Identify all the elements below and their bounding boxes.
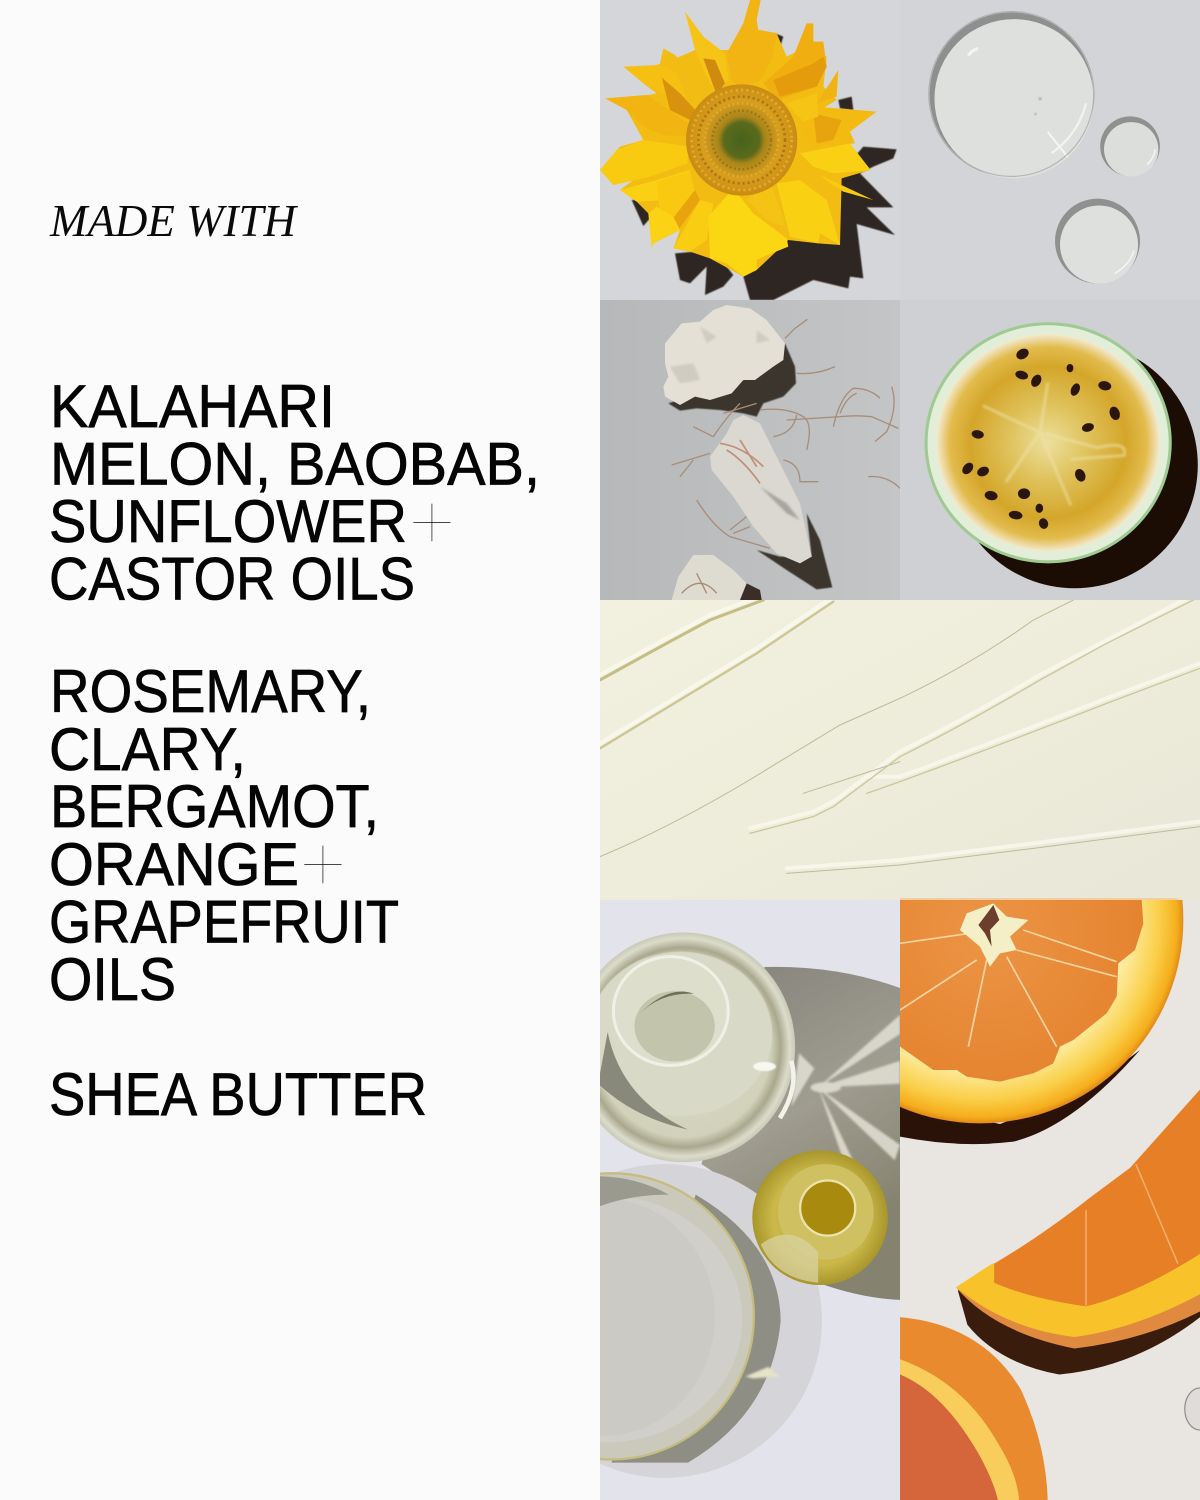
- water drop: [1185, 1388, 1200, 1430]
- centre seed cavity: [978, 905, 999, 947]
- text block: oils group two: ROSEMARY,: [50, 657, 371, 725]
- text block: oils group one: KALAHARI: [50, 372, 335, 440]
- wedge shadow: [958, 1283, 1200, 1375]
- top slice segment lines: [900, 930, 1117, 1047]
- text block: oils group one: CASTOR OILS: [49, 544, 415, 612]
- text block: oils group one: SUNFLOWER: [49, 487, 407, 555]
- photo: sunflower: [600, 0, 900, 300]
- shea lump three: [672, 555, 762, 600]
- small oil bottle: [752, 1150, 888, 1285]
- text block: oils group one: [49, 372, 540, 612]
- heading: made with: MADE WITH: [49, 195, 299, 246]
- photo: shea butter and roots: [600, 300, 900, 600]
- shea lump two: [710, 415, 812, 563]
- left panel background: [0, 0, 600, 1500]
- roots: [672, 319, 900, 548]
- text block: oils group two: BERGAMOT,: [50, 772, 379, 840]
- melon seeds: [960, 346, 1122, 530]
- top slice shadow: [900, 1050, 1140, 1144]
- top orange slice group: [900, 900, 1184, 1144]
- top slice flesh: [900, 900, 1143, 1082]
- shea lump one: [663, 305, 785, 405]
- text block: oils group two: GRAPEFRUIT: [49, 888, 399, 956]
- sunflower seed disk: [686, 84, 797, 196]
- cast shadow of vessels: [701, 967, 900, 1300]
- melon core branches: [983, 383, 1125, 505]
- lower orange half: [900, 1317, 1048, 1500]
- small droplet: [1100, 116, 1160, 176]
- photo: oil droplets: [900, 0, 1200, 300]
- bottom glass dish: [469, 1173, 780, 1460]
- top slice centre pith: [960, 903, 1028, 967]
- photo: glass vessels with oil: [600, 900, 900, 1500]
- text block: oils group one: MELON, BAOBAB,: [50, 430, 540, 498]
- sunflower petals: [600, 0, 877, 277]
- large droplet: [928, 11, 1094, 178]
- sunflower shadow: [632, 33, 897, 300]
- bottom bleed line: [900, 898, 1178, 900]
- large glass jar: [600, 932, 796, 1162]
- light rays: [791, 1015, 900, 1176]
- text block: shea butter: SHEA BUTTER: [49, 1060, 427, 1128]
- melon flesh: [936, 334, 1160, 551]
- photo: whipped butter texture: [600, 595, 1200, 900]
- top orange slice: [900, 900, 1184, 1124]
- medium droplet: [1055, 199, 1140, 284]
- butter ridges: [600, 600, 763, 680]
- butter ridge highlights: [600, 595, 1200, 868]
- text block: oils group two: ORANGE: [49, 830, 299, 898]
- orange wedge: [956, 1089, 1200, 1349]
- text block: oils group two: [49, 657, 399, 1013]
- shea shadows: [668, 343, 832, 589]
- text block: oils group one: +: [406, 472, 458, 571]
- melon rind: [925, 322, 1172, 563]
- text block: oils group two: +: [297, 814, 349, 913]
- photo: orange slices: [900, 900, 1200, 1500]
- text block: oils group two: CLARY,: [49, 715, 246, 783]
- text block: oils group two: OILS: [49, 945, 176, 1013]
- photo: yellow melon: [900, 300, 1200, 600]
- bottom glass dish shadow: [600, 1164, 822, 1478]
- melon shadow: [978, 358, 1198, 588]
